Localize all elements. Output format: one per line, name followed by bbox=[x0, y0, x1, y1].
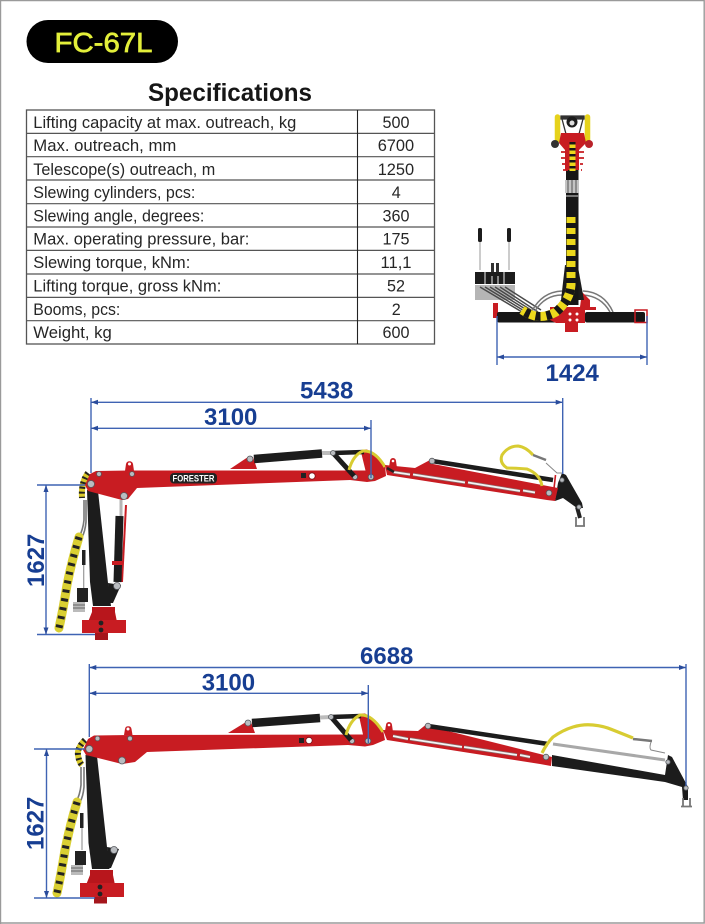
row: max outreach bbox=[33, 136, 414, 155]
row: lifting torque: Lifting torque, gross kNm: bbox=[33, 276, 221, 296]
crane side view: extended bbox=[57, 714, 692, 904]
dimension: extended height 1627: 1627 bbox=[22, 797, 49, 850]
row: max outreach: Max. outreach, mm bbox=[33, 136, 176, 155]
specifications table bbox=[26, 110, 434, 344]
dimension: base width 1424 bbox=[497, 316, 647, 387]
row: telescope outreach bbox=[33, 160, 414, 179]
model badge: FC-67L bbox=[54, 27, 152, 58]
row: max outreach: 6700 bbox=[378, 136, 414, 155]
row: lifting capacity: Lifting capacity at max. outreach, kg bbox=[33, 113, 296, 132]
striped hose bbox=[522, 212, 571, 316]
dimension: extended outreach 6688: 6688 bbox=[360, 643, 413, 670]
outer boom bbox=[385, 458, 558, 501]
dimension: extended first boom 3100: 3100 bbox=[202, 670, 255, 696]
row: max operating pressure: Max. operating pressure, bar: bbox=[33, 230, 249, 248]
row: lifting capacity: 500 bbox=[382, 113, 410, 132]
row: weight: Weight, kg bbox=[33, 323, 112, 342]
row: weight bbox=[33, 323, 410, 342]
dimension: folded first boom 3100 bbox=[91, 404, 371, 478]
post bbox=[86, 755, 110, 869]
row: lifting torque bbox=[33, 276, 405, 296]
dimension: extended height 1627 bbox=[22, 749, 95, 898]
valve and lever bbox=[71, 813, 86, 875]
dimension: folded first boom 3100: 3100 bbox=[204, 404, 257, 431]
outer boom cylinder and rod bbox=[425, 723, 665, 760]
dimension: folded outreach 5438: 5438 bbox=[300, 377, 353, 404]
outer boom bbox=[383, 722, 552, 766]
brand plate: FORESTER bbox=[172, 474, 215, 484]
row: slewing torque bbox=[33, 253, 412, 272]
mast bbox=[561, 170, 584, 305]
hydraulic arches bbox=[532, 291, 613, 312]
dimension: extended outreach 6688 bbox=[89, 643, 686, 786]
row: max operating pressure: 175 bbox=[382, 230, 410, 248]
heading: specifications: Specifications bbox=[148, 79, 312, 107]
crane front view bbox=[475, 116, 647, 332]
row: booms: 2 bbox=[392, 300, 401, 319]
control valve and levers bbox=[475, 228, 541, 312]
row: booms bbox=[33, 300, 401, 319]
row: slewing cylinders: 4 bbox=[392, 183, 401, 202]
row: slewing cylinders: Slewing cylinders, pcs: bbox=[33, 183, 195, 202]
slewing base bbox=[82, 607, 126, 640]
row: slewing torque: Slewing torque, kNm: bbox=[33, 253, 190, 272]
dimension: folded height 1627 bbox=[23, 485, 95, 634]
main boom cylinder and linkage bbox=[252, 714, 383, 740]
hose bundle bbox=[59, 473, 88, 628]
valve and lever bbox=[73, 550, 88, 612]
row: max operating pressure bbox=[33, 230, 410, 248]
dimension: extended first boom 3100 bbox=[89, 670, 368, 743]
telescope section bbox=[552, 755, 692, 806]
post bbox=[87, 490, 111, 606]
dimension: base width 1424: 1424 bbox=[546, 360, 600, 387]
tip section bbox=[555, 473, 585, 526]
row: slewing cylinders bbox=[33, 183, 401, 202]
row: lifting torque: 52 bbox=[387, 276, 405, 296]
outer boom cylinder bbox=[429, 458, 556, 493]
row: telescope outreach: 1250 bbox=[378, 160, 414, 179]
model badge bbox=[26, 20, 178, 63]
outer boom hose bbox=[501, 446, 562, 486]
row: slewing angle: Slewing angle, degrees: bbox=[33, 206, 204, 226]
row: booms: Booms, pcs: bbox=[33, 300, 120, 319]
lift cylinder bbox=[112, 500, 126, 590]
row: slewing angle bbox=[33, 206, 410, 226]
row: slewing torque: 11,1 bbox=[380, 253, 412, 272]
slewing base bbox=[80, 870, 124, 904]
main boom bbox=[85, 450, 386, 500]
dimension: folded height 1627: 1627 bbox=[23, 534, 50, 587]
dimension: folded outreach 5438 bbox=[91, 377, 563, 474]
main boom bbox=[83, 714, 385, 764]
crane side view: folded bbox=[59, 446, 585, 640]
hose bundle bbox=[57, 740, 85, 893]
row: weight: 600 bbox=[382, 323, 410, 342]
outer boom hose bbox=[542, 725, 665, 753]
row: telescope outreach: Telescope(s) outreach, m bbox=[33, 160, 215, 179]
head assembly bbox=[551, 116, 593, 171]
main boom cylinder and linkage bbox=[254, 450, 385, 476]
base beam bbox=[493, 292, 647, 332]
row: slewing angle: 360 bbox=[382, 206, 410, 226]
